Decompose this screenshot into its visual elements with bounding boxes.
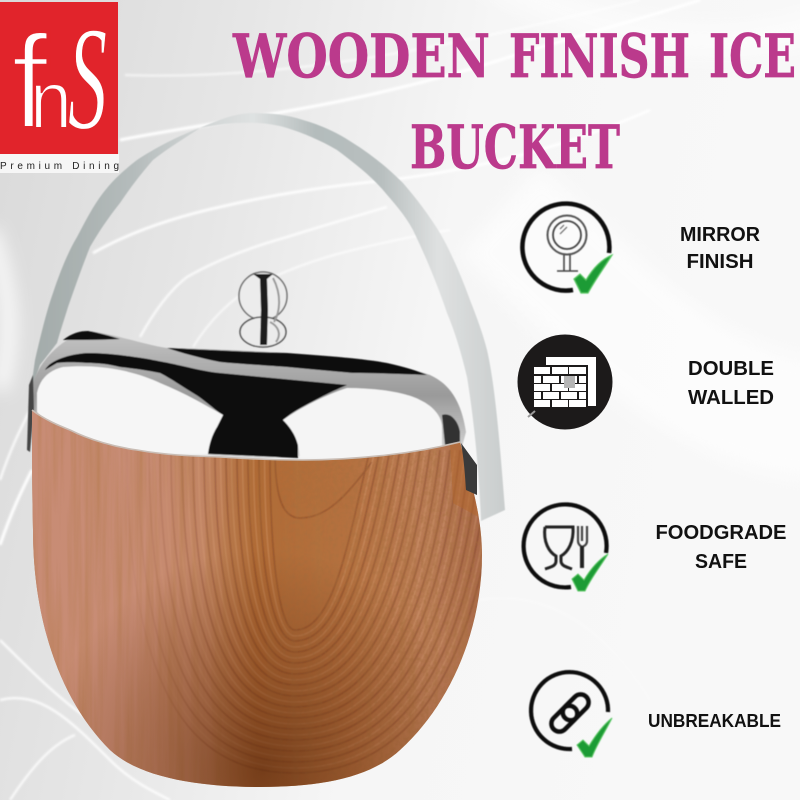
- icon: glass and fork with check: [524, 504, 608, 591]
- icon: brick walls: [518, 334, 612, 430]
- logo: fnS Premium Dining: Premium Dining: [0, 161, 119, 172]
- lid knob: [239, 272, 287, 347]
- logo: fnS Premium Dining: f: [11, 8, 49, 157]
- logo: fnS Premium Dining: n: [30, 54, 72, 146]
- feature: foodgrade safe: [524, 504, 786, 591]
- wooden body: [32, 411, 482, 787]
- logo: fnS Premium Dining: [0, 0, 119, 173]
- hinge: [461, 443, 477, 495]
- title: WOODEN: [232, 22, 490, 92]
- feature: mirror finish: [522, 204, 761, 293]
- feature: double walled: [518, 334, 774, 430]
- bucket handle: [30, 113, 505, 521]
- body rim highlight: [32, 410, 460, 460]
- logo: fnS Premium Dining: S: [68, 0, 107, 161]
- label: DOUBLE: [688, 358, 774, 380]
- feature: double walled: WALLED: [688, 387, 774, 409]
- feature: mirror finish: FINISH: [686, 251, 754, 273]
- label: MIRROR: [680, 224, 761, 246]
- icon: mirror with check: [522, 204, 612, 293]
- feature: unbreakable: [531, 672, 781, 757]
- title: BUCKET: [410, 113, 620, 183]
- feature: foodgrade safe: SAFE: [695, 551, 747, 573]
- label: UNBREAKABLE: [648, 711, 781, 731]
- polished steel lid: [27, 331, 466, 460]
- label: FOODGRADE: [656, 522, 786, 544]
- title: FINISH: [509, 22, 690, 92]
- ice bucket illustration: [20, 113, 505, 800]
- icon: chain link with check: [531, 672, 612, 757]
- title: [232, 22, 796, 183]
